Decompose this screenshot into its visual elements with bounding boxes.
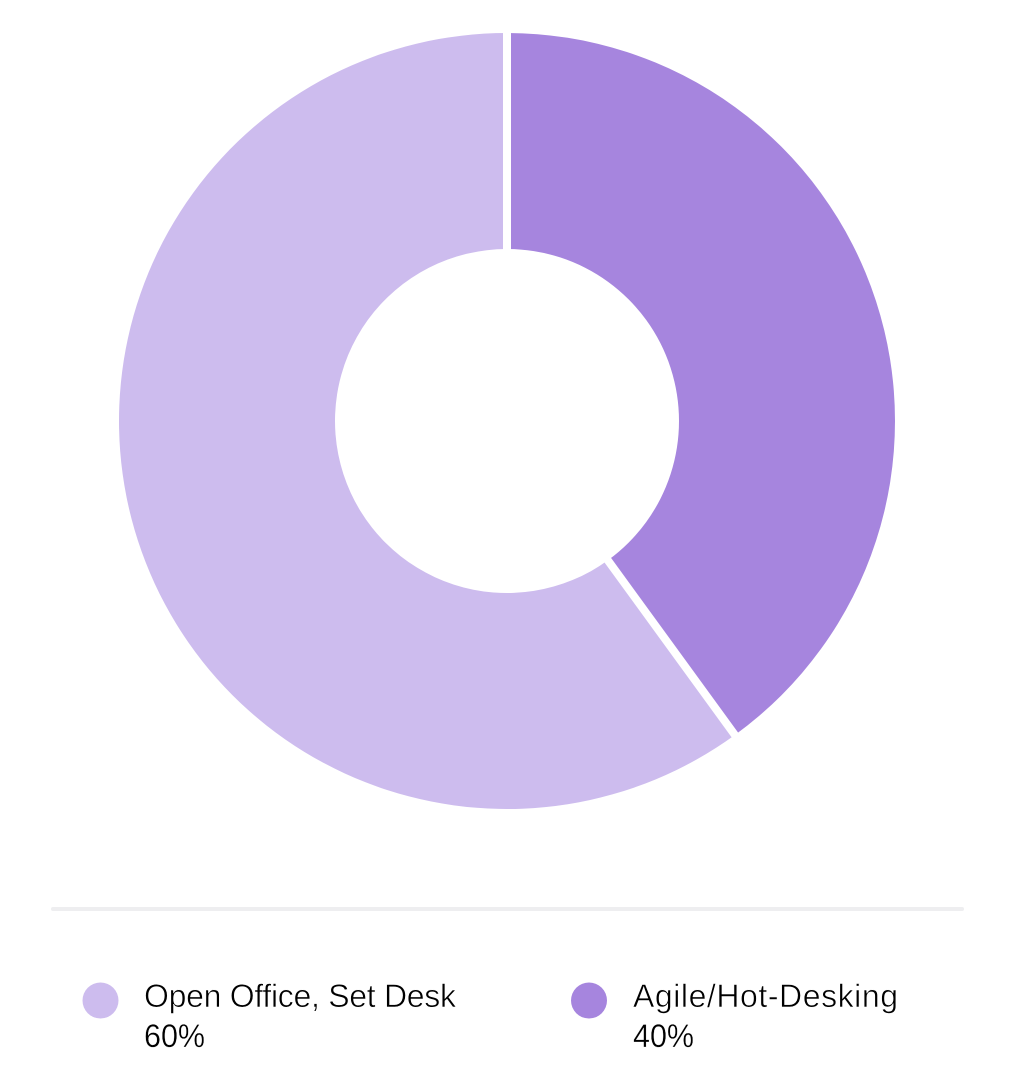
legend swatch: medium purple <box>571 982 607 1018</box>
donut chart <box>119 25 895 809</box>
legend label: Open Office, Set Desk: Open Office, Set Desk <box>144 978 457 1014</box>
legend value: 60%: 60% <box>144 1018 205 1054</box>
legend label: Agile/Hot-Desking: Agile/Hot-Desking <box>633 978 898 1014</box>
legend: Open Office, Set Desk <box>82 978 457 1054</box>
legend value: 40%: 40% <box>633 1018 694 1054</box>
segment: Agile/Hot-Desking 40% <box>507 33 895 735</box>
legend swatch: light purple <box>82 982 118 1018</box>
legend: Agile/Hot-Desking <box>571 978 898 1054</box>
segment: Open Office, Set Desk 60% <box>119 33 735 809</box>
